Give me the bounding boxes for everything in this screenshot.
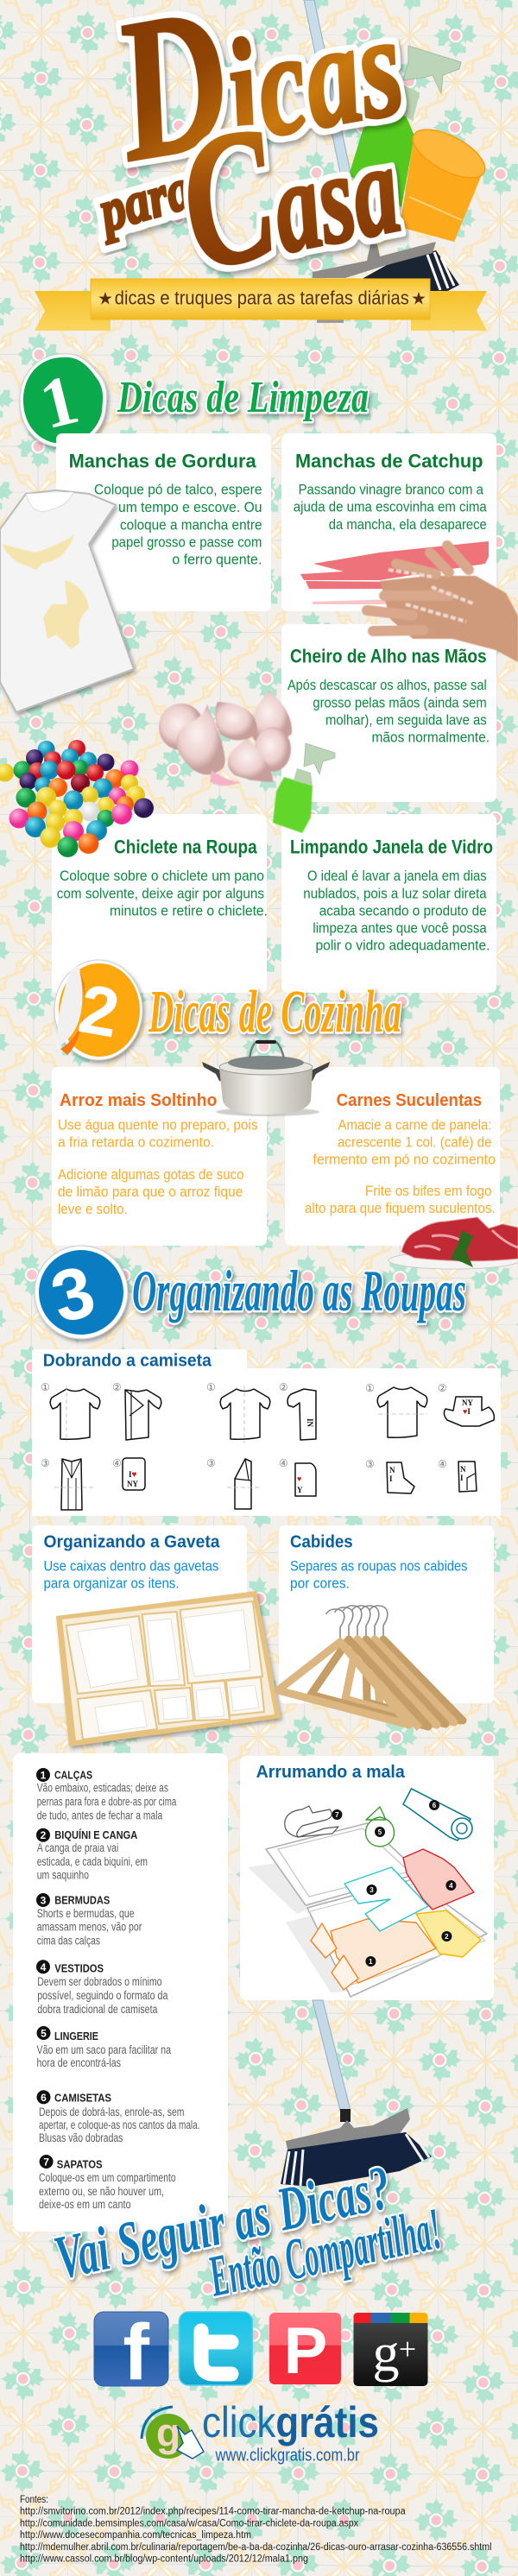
item 1: Calças: 1 — [41, 1770, 47, 1782]
folding sequence C: ♥I — [463, 1407, 471, 1416]
text: Manchas de Catchup: Passando vinagre branco com a — [299, 481, 483, 497]
text: Cabides: Separes as roupas nos cabides — [290, 1557, 468, 1574]
ribbon text: ★ — [411, 290, 426, 309]
item 5: Lingerie: LINGERIE — [54, 2030, 98, 2042]
folding sequence B: IN — [306, 1418, 314, 1428]
header illustration: cleaning supplies — [304, 0, 492, 323]
item 6: Camisetas: 6 — [41, 2092, 47, 2104]
folding sequence A: ① — [41, 1381, 50, 1393]
text: Cheiro de Alho nas Mãos: grosso pelas mãos (ainda sem — [313, 694, 487, 710]
numbered markers: 2 — [445, 1933, 449, 1941]
folding sequence A: I♥ — [129, 1470, 137, 1480]
icon: Twitter — [179, 2312, 252, 2385]
sources: http://www.docesecompanhia.com/tecnicas_limpeza.htm — [20, 2530, 251, 2541]
text: Carnes Suculentas: acrescente 1 col. (café) de — [338, 1133, 492, 1150]
text: Limpando Janela de Vidro — [290, 836, 493, 954]
suitcase base — [307, 1879, 487, 1997]
numbered markers: 5 — [378, 1828, 382, 1836]
rolled t-shirts — [403, 1789, 471, 1840]
badge 1 — [20, 354, 107, 447]
shoes — [285, 1806, 338, 1837]
drawer compartments — [66, 1601, 264, 1739]
title word: para: para — [88, 155, 199, 245]
text: Carnes Suculentas: fermento em pó no cozimento — [313, 1151, 496, 1167]
item 7: Sapatos: SAPATOS — [57, 2158, 103, 2170]
item 2: Biquíni e canga: A canga de praia vai — [37, 1841, 118, 1854]
panel: suitcase packing list — [13, 1753, 228, 2232]
item 4: Vestidos: possível, seguindo o formato da — [37, 1989, 168, 2002]
logo mark: g — [156, 2410, 180, 2455]
text: Limpando Janela de Vidro: O ideal é lavar a janela em dias — [307, 868, 487, 884]
folding sequence A — [41, 1381, 161, 1510]
dress — [403, 1849, 474, 1910]
text: Cabides: Cabides — [290, 1533, 353, 1552]
item 4: Vestidos — [36, 1960, 168, 2016]
folding sequence B: ③ — [206, 1457, 216, 1469]
list background — [13, 1753, 228, 2232]
text: Limpando Janela de Vidro: polir o vidro adequadamente. — [316, 938, 490, 954]
panel: Organizando a Gaveta — [32, 1525, 247, 1703]
text: Chiclete na Roupa: Coloque sobre o chiclete um pano — [60, 868, 264, 884]
illustration: cooking pot — [202, 1041, 330, 1116]
illustration: stained t-shirt — [0, 490, 134, 712]
item 1: Calças: de tudo, antes de fechar a mala — [37, 1809, 163, 1822]
text: Manchas de Catchup: Manchas de Catchup — [295, 451, 483, 472]
panel background — [240, 1756, 494, 2000]
folding sequence B: ② — [279, 1381, 288, 1393]
broom head — [286, 2108, 410, 2154]
folding sequence C: ① — [365, 1382, 375, 1394]
cards section 2 — [52, 1067, 500, 1246]
icon: Google+: g — [373, 2324, 399, 2383]
folding sequence A: ③ — [41, 1457, 50, 1469]
title word: Casa: Casa — [165, 63, 413, 310]
folding sequence C: ③ — [365, 1458, 375, 1470]
text: Chiclete na Roupa: com solvente, deixe agir por alguns — [57, 885, 264, 901]
text: Chiclete na Roupa — [57, 836, 268, 919]
numbered markers: 3 — [370, 1886, 374, 1894]
text: Cheiro de Alho nas Mãos: Cheiro de Alho nas Mãos — [290, 646, 487, 667]
folding sequence B: ④ — [279, 1457, 288, 1469]
text: Cabides — [290, 1533, 468, 1591]
social icons — [94, 2308, 428, 2396]
text: Carnes Suculentas: alto para que fiquem suculentos. — [305, 1200, 496, 1216]
text: Manchas de Gordura: Manchas de Gordura — [69, 451, 256, 472]
item 6: Camisetas: Blusas vão dobradas — [39, 2131, 123, 2144]
text: Limpando Janela de Vidro: acaba secando o produto de — [319, 902, 487, 919]
lingerie bag — [366, 1807, 394, 1847]
icon: Pinterest: P — [284, 2314, 327, 2388]
card background: Carnes — [285, 1067, 500, 1246]
numbered markers: 4 — [449, 1882, 453, 1890]
suitcase lid — [266, 1823, 420, 1905]
numbered markers: 1 — [369, 1958, 373, 1966]
item 1: Calças: pernas para fora e dobre-as por cima — [37, 1796, 177, 1809]
hanger frames — [278, 1639, 463, 1728]
text: Manchas de Gordura: coloque a mancha entre — [120, 516, 262, 533]
ribbon text: ★ — [98, 290, 113, 309]
item 2: Biquíni e canga — [36, 1828, 148, 1882]
illustration: garlic — [159, 691, 292, 786]
illustration: drawer with compartments — [56, 1591, 281, 1746]
item 4: Vestidos: Devem ser dobrados o mínimo — [37, 1975, 162, 1988]
text: Cabides: por cores. — [290, 1575, 350, 1591]
icon: Facebook — [94, 2308, 168, 2396]
panel: Arrumando a mala — [240, 1756, 494, 2000]
sources: Fontes: — [20, 2495, 48, 2505]
illustration: ketchup stain and washing hands — [300, 541, 518, 662]
text: Manchas de Gordura: um tempo e escove. Ou — [118, 499, 262, 515]
folding sequence B: Y — [297, 1486, 303, 1494]
shirt stains — [2, 535, 89, 649]
item 2: Biquíni e canga: 2 — [41, 1829, 47, 1841]
icon: spray bottle — [349, 46, 461, 207]
text: Manchas de Gordura: o ferro quente. — [172, 552, 262, 568]
icon: Pinterest — [269, 2313, 341, 2388]
text: Cheiro de Alho nas Mãos: Após descascar os alhos, passe sal — [287, 677, 487, 693]
folding sequence B: ♥ — [297, 1474, 301, 1483]
sources: http://mdemulher.abril.com.br/culinaria/reportagem/be-a-ba-da-cozinha/26-dicas-ouro-arrasar-cozinha-636556.shtml — [20, 2542, 492, 2553]
url: www.clickgratis.com.br — [215, 2447, 360, 2466]
text: Manchas de Catchup — [294, 451, 487, 533]
item 5: Lingerie: hora de encontrá-las — [36, 2056, 121, 2069]
suitcase diagram — [248, 1789, 487, 1997]
text: Cheiro de Alho nas Mãos — [287, 646, 490, 745]
panel: Dobrando a camiseta — [32, 1349, 501, 1516]
folding sequence A: NY — [127, 1480, 138, 1488]
folding sequence C: I — [460, 1474, 464, 1482]
text: Arroz mais Soltinho: a fria retarda o cozimento. — [58, 1133, 214, 1150]
folding sequence C: N — [460, 1465, 466, 1474]
folding sequence B — [206, 1381, 316, 1509]
text: Carnes Suculentas: Amacie a carne de panela: — [338, 1116, 492, 1133]
text: Arroz mais Soltinho: leve e solto. — [58, 1201, 128, 1217]
text: Arroz mais Soltinho: Arroz mais Soltinho — [60, 1091, 217, 1110]
hanger hooks — [326, 1606, 388, 1640]
text: Limpando Janela de Vidro: nublados, pois a luz solar direta — [303, 885, 487, 901]
folding sequence A: ② — [112, 1381, 122, 1393]
icon: Google+: + — [399, 2332, 416, 2366]
item 2: Biquíni e canga: um saquinho — [37, 1869, 89, 1882]
item 3: Bermudas: 3 — [41, 1894, 47, 1906]
item 7: Sapatos: 7 — [43, 2156, 49, 2169]
text: Limpando Janela de Vidro: limpeza antes que você possa — [313, 920, 487, 937]
item 3: Bermudas: amassam menos, vão por — [37, 1921, 142, 1934]
item 6: Camisetas: apertar, e coloque-as nos cantos da mala. — [39, 2118, 200, 2131]
section 3 heading — [35, 1246, 466, 1339]
card background: Cheiro de Alho — [281, 624, 496, 802]
item 2: Biquíni e canga: BIQUÍNI E CANGA — [54, 1828, 138, 1841]
illustration: gumballs — [0, 740, 154, 857]
broom collar — [340, 2109, 351, 2122]
folding sequence C: N — [389, 1466, 395, 1474]
sources: http://comunidade.bemsimples.com/casa/w/casa/Como-tirar-chiclete-da-roupa.aspx — [20, 2519, 358, 2529]
text: Organizando a Gaveta: para organizar os itens. — [43, 1575, 180, 1591]
folding sequence C: ④ — [438, 1458, 447, 1470]
text: Manchas de Catchup: ajuda de uma escovinha em cima — [294, 499, 487, 515]
card background: Manchas de Gordura — [56, 433, 271, 611]
card background: Manchas de Catchup — [281, 433, 496, 611]
text: Carnes Suculentas: Frite os bifes em fogo — [365, 1183, 492, 1199]
ribbon banner — [35, 279, 487, 331]
text: Manchas de Gordura: Coloque pó de talco, espere — [94, 482, 262, 498]
sources: http://smvitorino.com.br/2012/index.php/recipes/114-como-tirar-mancha-de-ketchup-na-roupa — [20, 2507, 406, 2517]
pants — [331, 1919, 436, 1983]
wordmark: clickgrátis — [202, 2398, 379, 2447]
cards section 1 — [52, 433, 496, 993]
illustration: spray bottle — [273, 743, 335, 833]
icon: broom handle — [304, 0, 351, 173]
title: Dicas para Casa — [88, 0, 416, 310]
text: Arroz mais Soltinho: de limão para que o arroz fique — [58, 1184, 243, 1200]
folding sequence C: ② — [438, 1382, 447, 1394]
item 5: Lingerie: 5 — [41, 2027, 47, 2039]
badge 3 — [35, 1246, 128, 1339]
item 5: Lingerie — [36, 2026, 171, 2069]
item 1: Calças: Vão embaixo, esticadas; deixe as — [37, 1782, 168, 1795]
item 1: Calças — [36, 1768, 177, 1822]
item 5: Lingerie: Vão em um saco para facilitar na — [36, 2043, 171, 2056]
icon: Facebook: f — [123, 2308, 149, 2396]
numbered markers — [332, 1800, 456, 1967]
text: Organizando a Gaveta — [43, 1533, 220, 1591]
section 1 heading — [20, 354, 369, 447]
panel: Cabides — [279, 1525, 494, 1703]
badge 2 — [54, 960, 142, 1060]
badge 2: 2 — [73, 969, 124, 1052]
illustration: wooden hangers — [278, 1606, 463, 1728]
item 2: Biquíni e canga: esticada, e cada biquíni, em — [37, 1855, 148, 1868]
text: Cheiro de Alho nas Mãos: molhar), em seguida lave as — [325, 712, 487, 729]
numbered markers: 7 — [335, 1811, 339, 1819]
text: Arroz mais Soltinho: Use água quente no preparo, pois — [58, 1116, 257, 1133]
ribbon centre — [91, 279, 430, 319]
numbered markers: 6 — [433, 1802, 437, 1809]
ribbon text: dicas e truques para as tarefas diárias — [115, 287, 409, 309]
card background: Chiclete — [52, 814, 267, 993]
text: Chiclete na Roupa: Chiclete na Roupa — [114, 836, 257, 857]
logo: clickgrátis — [142, 2398, 379, 2466]
sources — [20, 2495, 492, 2565]
folding sequence C: NY — [462, 1398, 473, 1407]
icon: orange bucket — [400, 120, 492, 242]
icon: Google+ — [354, 2313, 428, 2386]
item 3: Bermudas: BERMUDAS — [54, 1894, 111, 1907]
icon: broom head — [313, 242, 459, 323]
item 6: Camisetas: CAMISETAS — [54, 2091, 111, 2105]
text: Carnes Suculentas — [305, 1091, 496, 1216]
item 7: Sapatos — [39, 2155, 176, 2211]
badge 3: 3 — [43, 1250, 103, 1338]
folding sequence C — [365, 1382, 494, 1493]
heading: Dobrando a camiseta — [43, 1352, 212, 1371]
item 7: Sapatos: deixe-os em um canto — [39, 2198, 131, 2211]
text: Arroz mais Soltinho: Adicione algumas gotas de suco — [58, 1166, 243, 1183]
broom bristles — [281, 2132, 432, 2187]
text: Organizando a Gaveta: Organizando a Gaveta — [43, 1533, 220, 1552]
item 3: Bermudas: Shorts e bermudas, que — [37, 1907, 135, 1920]
item 7: Sapatos: externo ou, se não houver um, — [39, 2185, 164, 2198]
folding sequence C: I — [389, 1474, 393, 1483]
text: Manchas de Gordura — [69, 451, 262, 568]
heading: Arrumando a mala — [256, 1763, 406, 1782]
badge 1: 1 — [32, 359, 85, 444]
text: Organizando a Gaveta: Use caixas dentro das gavetas — [43, 1557, 218, 1574]
shorts — [344, 1867, 428, 1931]
item 6: Camisetas: Depois de dobrá-las, enrole-as, sem — [39, 2106, 185, 2118]
item 4: Vestidos: 4 — [41, 1961, 47, 1973]
item 7: Sapatos: Coloque-os em um compartimento — [39, 2171, 176, 2184]
ribbon tails — [35, 291, 487, 331]
folding sequence A: ④ — [112, 1457, 122, 1469]
item 6: Camisetas — [36, 2090, 200, 2144]
suitcase shadows — [248, 1863, 347, 1992]
item 3: Bermudas — [36, 1893, 142, 1948]
text: Carnes Suculentas: Carnes Suculentas — [337, 1091, 482, 1110]
folding sequence B: ① — [206, 1381, 216, 1393]
folded clothes — [78, 1610, 259, 1733]
call to action: Vai Seguir as Dicas? Então Compartilha! — [48, 2152, 447, 2309]
logo mark — [142, 2407, 204, 2459]
item 1: Calças: CALÇAS — [54, 1769, 92, 1782]
soapy hands — [367, 546, 518, 662]
heading: Dicas de Limpeza: Dicas de Limpeza — [117, 373, 369, 422]
text: Manchas de Catchup: da mancha, ela desaparece — [329, 516, 487, 533]
item 4: Vestidos: VESTIDOS — [54, 1961, 104, 1974]
illustration: broom — [281, 2000, 432, 2187]
item 4: Vestidos: dobra tradicional de camiseta — [37, 2003, 158, 2016]
card background: Janela — [281, 814, 496, 993]
panel background — [32, 1349, 501, 1516]
broom handle — [313, 2000, 351, 2111]
section 2 heading — [54, 960, 401, 1060]
bikini — [416, 1910, 481, 1957]
red brush strokes — [300, 541, 489, 604]
text: Chiclete na Roupa: minutos e retire o chiclete. — [110, 902, 268, 919]
illustration: raw meat on a plate — [388, 1217, 518, 1269]
item 3: Bermudas: cima das calças — [37, 1935, 100, 1948]
text: Arroz mais Soltinho — [58, 1091, 257, 1217]
card background: Arroz — [52, 1067, 267, 1246]
text: Cheiro de Alho nas Mãos: mãos normalmente. — [371, 729, 490, 745]
sources: http://www.cassol.com.br/blog/wp-content/uploads/2012/12/mala1.png — [20, 2554, 308, 2565]
text: Manchas de Gordura: papel grosso e passe com — [111, 534, 262, 551]
